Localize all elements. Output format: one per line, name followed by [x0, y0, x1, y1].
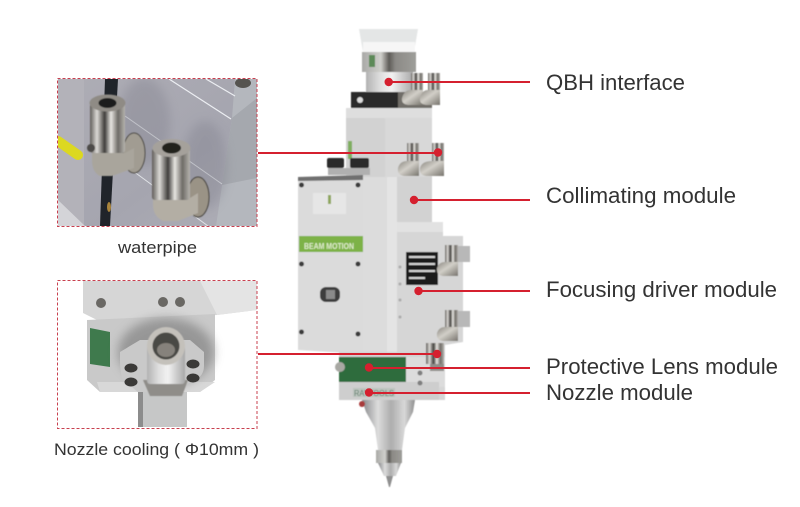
icon: mounting clamp: [120, 340, 204, 394]
nozzle cooling fitting: [418, 343, 444, 386]
label: QBH interface: QBH interface: [546, 70, 685, 95]
focusing driver body: [363, 177, 463, 400]
driver box with Beam Motion label: BEAM MOTION: [304, 242, 354, 251]
QBH interface: [351, 29, 432, 108]
top fittings: [402, 73, 440, 105]
caption: nozzle cooling: Nozzle cooling ( Φ10mm ): [54, 440, 259, 459]
label: Protective Lens module: Protective Lens module: [546, 354, 778, 379]
collimating fittings: [398, 143, 444, 176]
icon: first elbow fitting: [87, 94, 145, 176]
caption: waterpipe: waterpipe: [117, 238, 197, 257]
driver box with Beam Motion label: [298, 175, 363, 354]
collimating module body: [327, 108, 432, 224]
label: Focusing driver module: Focusing driver module: [546, 277, 777, 302]
focusing fittings: [437, 245, 470, 341]
label: Collimating module: Collimating module: [546, 183, 736, 208]
label: Nozzle module: Nozzle module: [546, 380, 693, 405]
icon: second elbow fitting: [152, 139, 209, 221]
leader lines and dots: [258, 78, 530, 397]
inset panel: nozzle cooling: [58, 280, 257, 428]
nozzle: [359, 400, 415, 487]
product photo: cutting head: [298, 29, 470, 487]
icon: screws: [96, 297, 185, 308]
protective lens module and base: [335, 352, 445, 400]
icon: push-in fitting: [143, 327, 188, 396]
protective lens module and base: RAYTOOLS: [354, 389, 394, 398]
icon: screw head: [235, 78, 251, 88]
inset panel: waterpipe: [58, 78, 257, 226]
